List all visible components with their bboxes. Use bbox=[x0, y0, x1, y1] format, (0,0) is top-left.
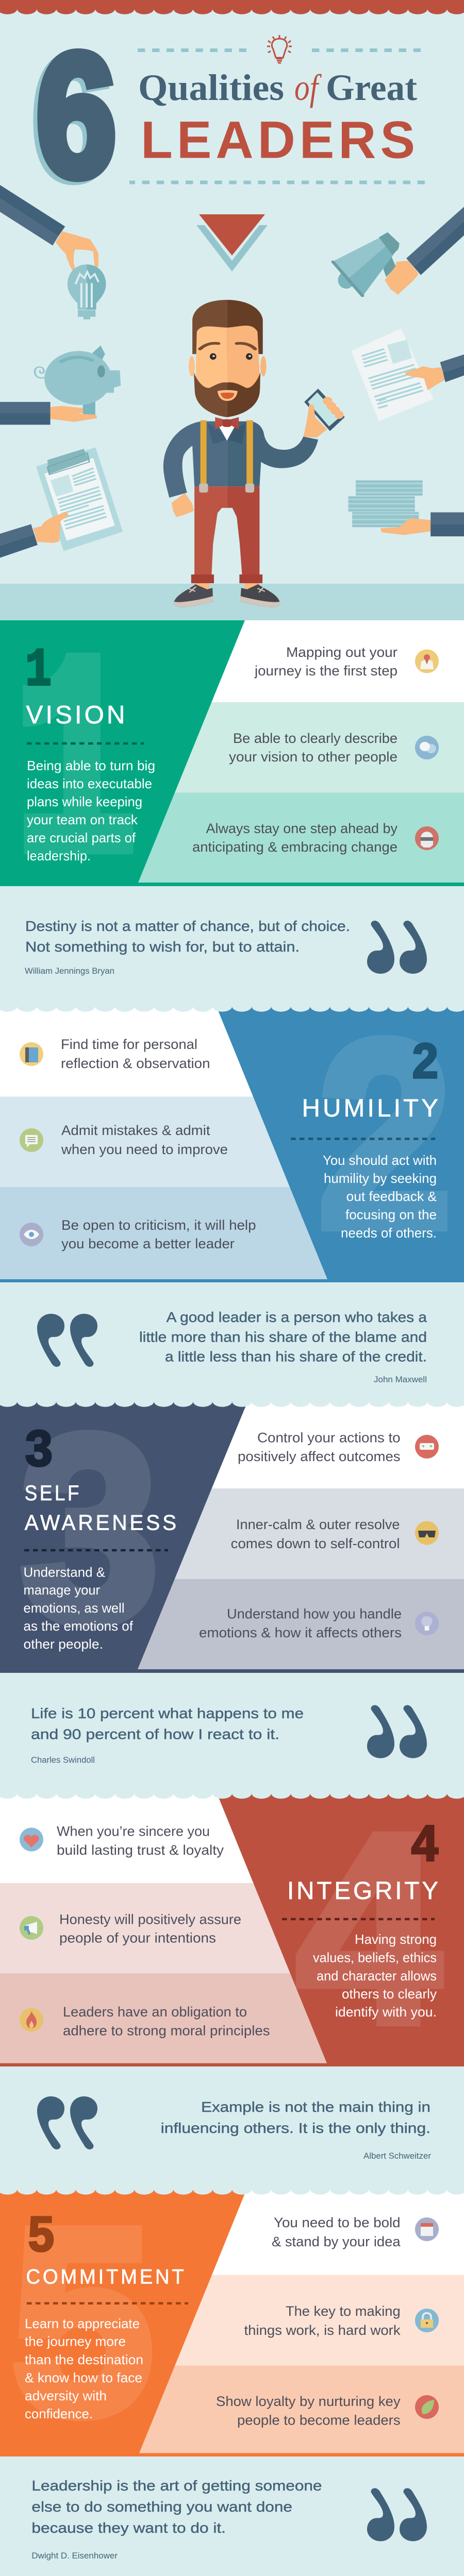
item 1 text bbox=[61, 1037, 210, 1071]
icon: speech bubbles bbox=[415, 736, 439, 759]
attribution: William Jennings Bryan bbox=[25, 966, 114, 976]
description: focusing on the bbox=[345, 1207, 437, 1222]
quote text bbox=[31, 2478, 322, 2536]
quote text: because they want to do it. bbox=[31, 2520, 226, 2536]
description: are crucial parts of bbox=[27, 830, 136, 845]
title: big numeral 6: 6 bbox=[32, 21, 112, 215]
description: other people. bbox=[24, 1636, 103, 1652]
panel: item rows bbox=[138, 1402, 464, 1669]
icon: padlock bbox=[415, 2309, 439, 2332]
panel: quote 5 background bbox=[0, 2456, 464, 2576]
item 3 text: you become a better leader bbox=[61, 1236, 235, 1251]
icon: opening quotation mark bbox=[37, 2096, 97, 2149]
item 1 text: build lasting trust & loyalty bbox=[57, 1842, 224, 1858]
character: hand holding phone bbox=[303, 388, 345, 437]
quote text: a little less than his share of the credit. bbox=[165, 1349, 427, 1364]
panel: header background bbox=[0, 0, 464, 620]
item 1 text bbox=[254, 645, 397, 679]
description bbox=[24, 1564, 134, 1652]
character: head bbox=[189, 300, 267, 417]
panel background bbox=[0, 2190, 464, 2456]
icon: title light bulb bbox=[267, 35, 292, 63]
item 2 text: Admit mistakes & admit bbox=[61, 1123, 210, 1138]
item 3 text: emotions & how it affects others bbox=[199, 1625, 402, 1640]
icon: helmet bbox=[415, 826, 439, 850]
item 1 text: journey is the first step bbox=[254, 663, 397, 679]
panel: item rows bbox=[0, 1007, 327, 1279]
quote 1 bbox=[25, 918, 427, 976]
description: manage your bbox=[24, 1582, 100, 1598]
icon: megaphone bbox=[20, 1916, 43, 1940]
panel: item rows bbox=[0, 1794, 327, 2063]
scallop: quote 1 lower edge bbox=[0, 1005, 464, 1012]
quote text: and 90 percent of how I react to it. bbox=[31, 1726, 279, 1742]
icon: note bubble bbox=[20, 1128, 43, 1152]
icon: book bbox=[20, 1042, 43, 1066]
character: left hand bbox=[172, 493, 194, 517]
heading: SELF bbox=[25, 1481, 81, 1505]
icon: closing quotation mark bbox=[367, 2488, 427, 2541]
quote text: influencing others. It is the only thing. bbox=[161, 2120, 430, 2136]
numeral: 5 bbox=[28, 2207, 54, 2262]
numeral: 2 bbox=[412, 1033, 438, 1089]
item 3 text bbox=[199, 1606, 402, 1640]
description: others to clearly bbox=[342, 1986, 437, 2002]
quote text bbox=[31, 1705, 304, 1742]
item 3 text: anticipating & embracing change bbox=[192, 839, 397, 855]
icon: opening quotation mark bbox=[37, 1314, 97, 1367]
heading: AWARENESS bbox=[25, 1511, 179, 1534]
item 2 text: Be able to clearly describe bbox=[233, 731, 397, 746]
quote 2 bbox=[37, 1309, 427, 1384]
character: torso and arms bbox=[163, 420, 318, 498]
title dashed rules bbox=[129, 50, 425, 182]
scallop: quote 5 lower edge bbox=[0, 2575, 464, 2576]
item 2 text: people of your intentions bbox=[59, 1930, 216, 1946]
quote text: else to do something you want done bbox=[31, 2499, 292, 2515]
illustration: hand holding light bulb bbox=[0, 185, 106, 319]
item 1 text: & stand by your idea bbox=[272, 2234, 401, 2249]
item 3 text: Always stay one step ahead by bbox=[206, 821, 397, 836]
icon: sunglasses bbox=[415, 1521, 439, 1545]
description: Learn to appreciate bbox=[25, 2316, 140, 2331]
description: as the emotions of bbox=[24, 1618, 134, 1634]
description: Having strong bbox=[355, 1931, 437, 1947]
character: trousers bbox=[191, 486, 262, 583]
scallop: quote 2 lower edge bbox=[0, 1400, 464, 1407]
icon: heart bbox=[20, 1828, 43, 1852]
ghost numeral: 1 bbox=[13, 608, 138, 936]
character: bow tie bbox=[215, 417, 239, 430]
item 3 text: Leaders have an obligation to bbox=[63, 2004, 247, 2020]
description: You should act with bbox=[323, 1153, 437, 1168]
illustration: bearded leader character bbox=[163, 300, 345, 607]
item 2 text bbox=[244, 2303, 401, 2338]
quote text: little more than his share of the blame and bbox=[139, 1329, 427, 1345]
description bbox=[27, 758, 155, 863]
description: humility by seeking bbox=[324, 1171, 437, 1186]
item 3 text: Be open to criticism, it will help bbox=[61, 1217, 256, 1233]
heading: COMMITMENT bbox=[26, 2266, 187, 2289]
icon: closing quotation mark bbox=[367, 921, 427, 974]
item 1 text: Control your actions to bbox=[257, 1430, 401, 1446]
illustration: hand holding clipboard bbox=[0, 447, 123, 558]
item 3 text bbox=[61, 1217, 256, 1251]
item 1 text: When you’re sincere you bbox=[57, 1823, 210, 1839]
icon: closing quotation mark bbox=[367, 1705, 427, 1758]
icon: down arrow bbox=[196, 214, 268, 272]
description bbox=[323, 1153, 437, 1241]
panel background bbox=[0, 1794, 464, 2066]
description: ideas into executable bbox=[27, 776, 152, 791]
panel: quote 3 background bbox=[0, 1673, 464, 1794]
description: & know how to face bbox=[25, 2370, 142, 2385]
quote text: Not something to wish for, but to attain. bbox=[25, 939, 300, 955]
illustration: hand holding newspaper bbox=[351, 329, 464, 421]
panel: quote 1 background bbox=[0, 886, 464, 1007]
item 3 text: Understand how you handle bbox=[227, 1606, 402, 1622]
item 1 text: Mapping out your bbox=[286, 645, 397, 660]
illustration: hand holding megaphone bbox=[332, 207, 464, 296]
description bbox=[313, 1931, 437, 2020]
title: Qualities of Great: Qualities bbox=[138, 67, 284, 108]
panel background bbox=[0, 620, 464, 886]
item 2 text bbox=[229, 731, 397, 765]
panel: quote 2 background bbox=[0, 1282, 464, 1402]
scallop: quote 4 lower edge bbox=[0, 2188, 464, 2195]
description: your team on track bbox=[27, 812, 138, 827]
title: big numeral 6: 6 bbox=[37, 18, 116, 212]
item 2 text: things work, is hard work bbox=[244, 2323, 401, 2338]
panel: quote 4 background bbox=[0, 2066, 464, 2190]
section 4: integrity bbox=[0, 1779, 464, 2078]
quote text: Leadership is the art of getting someone bbox=[31, 2478, 322, 2494]
item 1 text: reflection & observation bbox=[61, 1056, 210, 1071]
heading bbox=[25, 1481, 179, 1534]
item 2 text: The key to making bbox=[286, 2303, 401, 2319]
panel: item rows bbox=[138, 620, 464, 883]
item 1 text: positively affect outcomes bbox=[238, 1449, 401, 1464]
item 2 text: Honesty will positively assure bbox=[59, 1912, 241, 1927]
item 2 text: comes down to self-control bbox=[231, 1536, 400, 1551]
icon: bulb bbox=[415, 1612, 439, 1635]
numeral: 3 bbox=[25, 1419, 53, 1477]
quote text: Life is 10 percent what happens to me bbox=[31, 1705, 304, 1721]
quote text: Destiny is not a matter of chance, but of choice. bbox=[25, 918, 350, 934]
numeral: 4 bbox=[411, 1816, 438, 1871]
section 2: humility bbox=[0, 985, 464, 1283]
quote 5 bbox=[31, 2478, 427, 2561]
section 1: vision bbox=[0, 608, 464, 936]
item 3 text: adhere to strong moral principles bbox=[63, 2023, 270, 2038]
item 3 text bbox=[216, 2394, 401, 2428]
item 2 text: your vision to other people bbox=[229, 749, 397, 765]
description: leadership. bbox=[27, 848, 91, 863]
quote 4 bbox=[37, 2096, 431, 2161]
ghost numeral: 2 bbox=[318, 985, 452, 1283]
item 1 text: You need to be bold bbox=[274, 2215, 401, 2230]
attribution: Albert Schweitzer bbox=[363, 2151, 431, 2161]
item 3 text: people to become leaders bbox=[237, 2412, 401, 2428]
title: Qualities of Great bbox=[138, 67, 417, 108]
numeral: 1 bbox=[25, 640, 52, 701]
quote text: A good leader is a person who takes a bbox=[167, 1309, 427, 1325]
item 2 text: when you need to improve bbox=[61, 1142, 228, 1157]
description: out feedback & bbox=[346, 1189, 437, 1204]
item 1 text bbox=[272, 2215, 401, 2249]
description: Understand & bbox=[24, 1564, 105, 1580]
attribution: Charles Swindoll bbox=[31, 1755, 95, 1765]
illustration: hand holding piggy bank bbox=[0, 346, 121, 425]
description: and character allows bbox=[317, 1968, 437, 1984]
item 2 text bbox=[59, 1912, 241, 1946]
panel background bbox=[0, 1402, 464, 1673]
item 2 text bbox=[61, 1123, 228, 1157]
top scalloped band bbox=[0, 0, 464, 14]
quote text bbox=[161, 2099, 430, 2136]
item 2 text bbox=[231, 1517, 400, 1551]
description: emotions, as well bbox=[24, 1600, 125, 1616]
ghost numeral: 4 bbox=[297, 1779, 442, 2078]
title: Qualities of Great: of bbox=[294, 67, 322, 108]
description: adversity with bbox=[25, 2388, 107, 2403]
title: LEADERS: LEADERS bbox=[141, 110, 419, 169]
icon: leaf bbox=[415, 2395, 439, 2419]
icon: eye bbox=[20, 1223, 43, 1246]
icon: calendar bbox=[415, 2217, 439, 2241]
section 3: self awareness bbox=[0, 1381, 464, 1677]
panel background bbox=[0, 1007, 464, 1282]
item 3 text: Show loyalty by nurturing key bbox=[216, 2394, 401, 2409]
quote text bbox=[139, 1309, 427, 1364]
quote 3 bbox=[31, 1705, 427, 1765]
title: Qualities of Great: Great bbox=[326, 67, 417, 108]
description: than the destination bbox=[25, 2352, 143, 2367]
item 2 text: Inner-calm & outer resolve bbox=[236, 1517, 400, 1532]
description: the journey more bbox=[25, 2334, 126, 2349]
description: plans while keeping bbox=[27, 794, 142, 809]
description: confidence. bbox=[25, 2406, 93, 2421]
character: shoes and ankles bbox=[174, 582, 280, 607]
attribution: John Maxwell bbox=[374, 1375, 427, 1384]
item 1 text: Find time for personal bbox=[61, 1037, 197, 1052]
icon: flame bbox=[20, 2008, 43, 2032]
attribution: Dwight D. Eisenhower bbox=[31, 2551, 118, 2561]
ghost numeral: 5 bbox=[11, 2173, 154, 2470]
quote text: Example is not the main thing in bbox=[201, 2099, 430, 2115]
section 5: commitment bbox=[0, 2173, 464, 2470]
quote text bbox=[25, 918, 350, 955]
ghost numeral: 3 bbox=[20, 1381, 159, 1677]
icon: map pin bbox=[415, 649, 439, 673]
item 3 text bbox=[63, 2004, 270, 2038]
description: Being able to turn big bbox=[27, 758, 155, 773]
description: needs of others. bbox=[341, 1225, 437, 1241]
description bbox=[25, 2316, 143, 2421]
heading: HUMILITY bbox=[302, 1095, 441, 1122]
item 3 text bbox=[192, 821, 397, 855]
description: values, beliefs, ethics bbox=[313, 1950, 437, 1965]
heading: VISION bbox=[26, 701, 128, 729]
icon: game controller bbox=[415, 1435, 439, 1459]
description: identify with you. bbox=[335, 2004, 437, 2020]
panel: item rows bbox=[139, 2190, 464, 2453]
scallop: quote 3 lower edge bbox=[0, 1792, 464, 1799]
item 1 text bbox=[57, 1823, 224, 1858]
heading: INTEGRITY bbox=[287, 1877, 441, 1905]
item 1 text bbox=[238, 1430, 401, 1464]
illustration: hand holding stack of papers bbox=[349, 480, 464, 536]
